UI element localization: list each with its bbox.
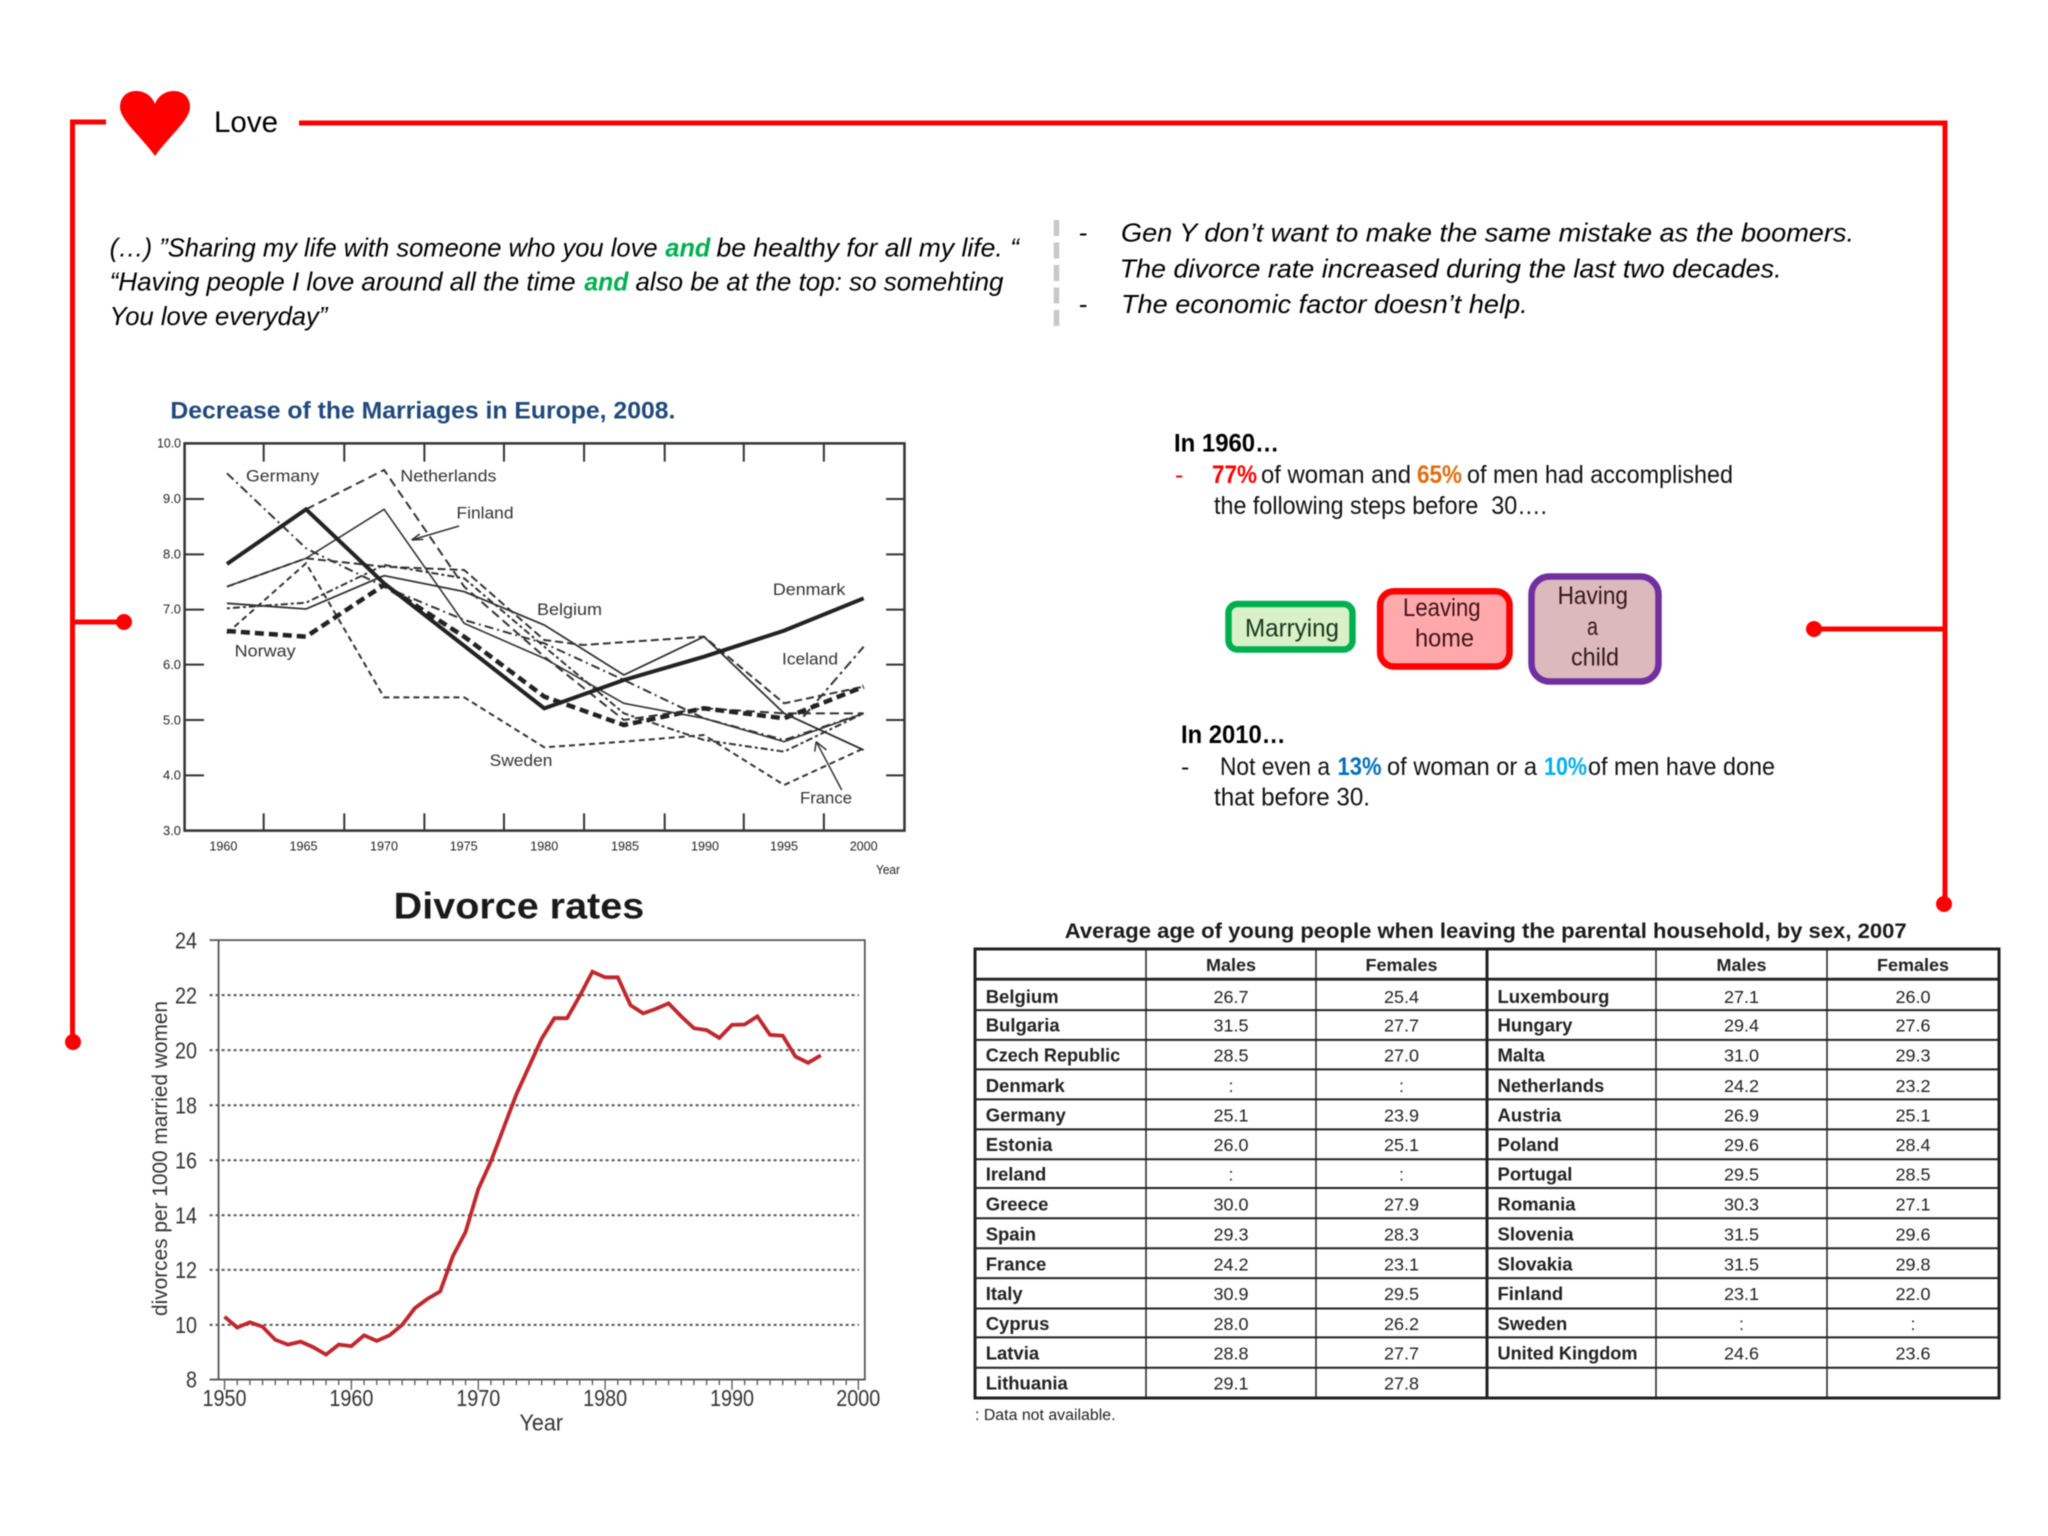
- table rows: left half: :: [1399, 1076, 1404, 1096]
- table rows: right half: Austria: [1498, 1105, 1562, 1126]
- heading: marriage chart title: Decrease of the Marriages in Europe, 2008.: [170, 397, 675, 424]
- table header: Males: [1716, 955, 1767, 975]
- text block: 1960 statistics: the following steps before 30….: [1214, 492, 1547, 520]
- text block: quotes: You love everyday”: [110, 301, 329, 331]
- x axis labels: 1995: [770, 839, 798, 854]
- box: Having a child: [1532, 576, 1658, 682]
- table rows: right half: 23.1: [1724, 1284, 1759, 1304]
- plot frame: [210, 940, 865, 1380]
- table rows: right half: Sweden: [1498, 1313, 1567, 1334]
- table rows: right half: Netherlands: [1498, 1075, 1604, 1096]
- table rows: left half: Germany: [986, 1105, 1067, 1126]
- series: Sweden: [227, 563, 864, 785]
- country labels: Denmark: [773, 580, 846, 599]
- y axis labels: [157, 436, 181, 838]
- table rows: right half: Luxembourg: [1498, 986, 1609, 1007]
- table rows: left half: Estonia: [986, 1134, 1053, 1155]
- table rows: left half: 30.9: [1213, 1284, 1249, 1304]
- table rows: right half: Hungary: [1498, 1014, 1573, 1035]
- table rows: right half: 26.9: [1724, 1106, 1759, 1126]
- table rows: right half: 27.1: [1724, 987, 1759, 1007]
- x axis labels: [202, 1385, 880, 1411]
- table rows: left half: 27.0: [1384, 1045, 1419, 1065]
- y axis labels: 10: [175, 1312, 197, 1338]
- box: Marrying: Marrying: [1245, 615, 1339, 643]
- table rows: left half: 29.5: [1384, 1284, 1419, 1304]
- table rows: right half: :: [1739, 1314, 1744, 1334]
- table rows: right half: 23.6: [1895, 1344, 1931, 1364]
- table header: Females: [1365, 955, 1438, 975]
- table rows: left half: 30.0: [1213, 1194, 1249, 1214]
- text block: quotes: “Having people I love around all the time: [110, 267, 576, 297]
- box: Having a child: child: [1571, 644, 1619, 672]
- y axis labels: 6.0: [163, 657, 181, 672]
- table rows: left half: 28.8: [1213, 1344, 1249, 1364]
- text block: 2010 statistics: Not even a: [1220, 753, 1330, 781]
- heading: 1960: In 1960…: [1174, 430, 1279, 458]
- divorce rate curve: [225, 972, 821, 1355]
- x axis labels: 1975: [450, 839, 478, 854]
- table rows: right half: [1498, 986, 1931, 1364]
- text block: Gen Y bullets: -: [1078, 218, 1088, 248]
- country labels: Finland: [456, 503, 514, 522]
- text block: Gen Y bullets: The economic factor doesn’t help.: [1121, 289, 1528, 319]
- table rows: left half: Latvia: [986, 1343, 1040, 1364]
- text block: quotes: and: [584, 267, 629, 297]
- arrows: Finland and France: [412, 526, 842, 790]
- table rows: right half: Finland: [1498, 1283, 1563, 1304]
- heading: Divorce rates: Divorce rates: [394, 886, 644, 926]
- y axis labels: 16: [175, 1147, 197, 1173]
- box: Marrying: [1228, 604, 1352, 650]
- y axis labels: 14: [175, 1202, 197, 1228]
- series: Finland: [227, 509, 864, 742]
- x axis labels: 2000: [850, 839, 878, 854]
- table rows: right half: 27.6: [1895, 1015, 1931, 1035]
- text block: quotes: be healthy for all my life. “: [716, 233, 1020, 263]
- table rows: left half: Denmark: [986, 1075, 1066, 1096]
- box: Having a child: a: [1587, 613, 1598, 641]
- text block: 2010 statistics: that before 30.: [1214, 784, 1370, 812]
- table grid: [975, 949, 1999, 1398]
- x axis title: Year: [520, 1410, 563, 1436]
- text block: 1960 statistics: of men had accomplished: [1467, 461, 1733, 489]
- table rows: left half: 27.7: [1384, 1015, 1419, 1035]
- table rows: right half: 27.1: [1895, 1194, 1931, 1214]
- y axis labels: 8: [186, 1367, 197, 1393]
- table rows: right half: :: [1910, 1314, 1916, 1334]
- series: Netherlands: [306, 470, 864, 720]
- heading: 2010: In 2010…: [1181, 721, 1286, 749]
- y axis labels: 7.0: [163, 602, 181, 617]
- table rows: right half: 30.3: [1724, 1194, 1759, 1214]
- y axis labels: 10.0: [157, 436, 181, 451]
- y axis labels: 5.0: [163, 712, 181, 727]
- line chart: marriages in Europe: [157, 436, 904, 877]
- x axis labels: 1980: [530, 839, 558, 854]
- text block: 1960 statistics: of woman and: [1261, 461, 1411, 489]
- text block: 2010 statistics: -: [1181, 753, 1189, 781]
- table rows: left half: 27.7: [1384, 1344, 1419, 1364]
- table rows: right half: 26.0: [1895, 987, 1931, 1007]
- chart frame and ticks: [185, 443, 904, 831]
- table rows: left half: 29.1: [1213, 1374, 1249, 1394]
- x axis labels: 1980: [583, 1385, 627, 1411]
- table rows: right half: 31.0: [1724, 1045, 1759, 1065]
- table rows: right half: 29.6: [1724, 1135, 1759, 1155]
- table rows: left half: 29.3: [1213, 1225, 1249, 1245]
- y axis labels: 8.0: [163, 546, 181, 561]
- table rows: right half: Portugal: [1498, 1163, 1572, 1184]
- table rows: left half: Cyprus: [986, 1313, 1049, 1334]
- table rows: right half: 28.4: [1895, 1135, 1931, 1155]
- text block: Gen Y bullets: The divorce rate increased during the last two decades.: [1120, 254, 1782, 284]
- text block: 2010 statistics: of woman or a: [1387, 753, 1537, 781]
- country labels: Sweden: [490, 751, 552, 770]
- text block: quotes: and: [665, 233, 711, 263]
- table rows: left half: 23.1: [1384, 1255, 1419, 1274]
- table rows: right half: 29.6: [1895, 1225, 1931, 1245]
- country labels: Iceland: [782, 649, 838, 668]
- heading: Love: Love: [214, 106, 278, 139]
- x axis labels: 1950: [202, 1385, 246, 1411]
- text block: Gen Y bullets: [1078, 218, 1854, 319]
- y axis labels: 22: [175, 982, 197, 1008]
- x axis labels: 1990: [710, 1385, 754, 1411]
- text block: 2010 statistics: 13%: [1338, 753, 1382, 781]
- y axis labels: [175, 927, 197, 1393]
- country labels: Germany: [246, 467, 320, 486]
- table rows: left half: 25.4: [1384, 987, 1419, 1007]
- table rows: left half: Spain: [986, 1224, 1036, 1245]
- text block: 2010 statistics: [1181, 753, 1775, 812]
- grid lines: [210, 995, 859, 1325]
- table rows: left half: 27.8: [1384, 1374, 1419, 1394]
- country labels: Norway: [235, 642, 296, 661]
- y axis labels: 20: [175, 1037, 197, 1063]
- text block: 2010 statistics: of men have done: [1588, 753, 1775, 781]
- table header: [1206, 955, 1949, 975]
- table rows: left half: [986, 986, 1419, 1394]
- text block: quotes: also be at the top: so somehting: [636, 267, 1004, 297]
- table header: Males: [1206, 955, 1256, 975]
- x axis labels: 2000: [836, 1385, 880, 1411]
- country labels: Netherlands: [400, 467, 496, 486]
- table rows: right half: 29.3: [1895, 1045, 1931, 1065]
- series: Denmark: [227, 509, 864, 708]
- country labels: France: [800, 788, 852, 807]
- text block: quotes: (…) ”Sharing my life with someone who you love: [110, 233, 658, 263]
- table header: Females: [1877, 955, 1949, 975]
- table rows: right half: 25.1: [1895, 1106, 1931, 1126]
- table rows: left half: Belgium: [986, 986, 1059, 1007]
- x axis labels: 1985: [611, 839, 639, 854]
- table rows: left half: 26.0: [1213, 1135, 1249, 1155]
- text block: 1960 statistics: -: [1175, 461, 1183, 489]
- text block: Gen Y bullets: Gen Y don’t want to make the same mistake as the boomers.: [1121, 218, 1854, 248]
- box: Leaving home: Leaving: [1403, 594, 1481, 622]
- series: Iceland: [227, 558, 864, 703]
- box: Leaving home: [1380, 591, 1510, 666]
- series: Germany: [227, 473, 864, 740]
- red frame connector: left: [65, 122, 132, 1050]
- table rows: right half: 24.2: [1724, 1076, 1759, 1096]
- text block: 1960 statistics: [1175, 461, 1733, 520]
- table rows: left half: 23.9: [1384, 1106, 1419, 1126]
- table rows: left half: :: [1228, 1164, 1234, 1184]
- y axis labels: 24: [175, 927, 197, 953]
- series: France: [227, 565, 864, 752]
- box: Having a child: Having: [1558, 582, 1628, 610]
- x axis labels: [209, 839, 901, 877]
- table rows: left half: 26.7: [1213, 987, 1249, 1007]
- series: Norway: [227, 585, 864, 725]
- table rows: left half: Italy: [986, 1283, 1023, 1304]
- box: Leaving home: home: [1415, 625, 1474, 653]
- text block: Gen Y bullets: -: [1078, 289, 1088, 319]
- table rows: left half: 25.1: [1384, 1135, 1419, 1155]
- table rows: right half: Slovenia: [1498, 1224, 1574, 1245]
- table rows: left half: 24.2: [1213, 1255, 1249, 1274]
- heading: table title: Average age of young people when leaving the parental household, by sex, 2007: [1065, 919, 1907, 943]
- table rows: left half: Czech Republic: [986, 1044, 1120, 1065]
- table rows: right half: 29.4: [1724, 1015, 1759, 1035]
- x axis labels: 1970: [456, 1385, 500, 1411]
- table rows: right half: Malta: [1498, 1044, 1545, 1065]
- y axis labels: 4.0: [163, 768, 181, 783]
- icon: heart: [120, 91, 190, 156]
- table rows: left half: :: [1228, 1076, 1234, 1096]
- table rows: left half: Ireland: [986, 1163, 1046, 1184]
- table rows: right half: 31.5: [1724, 1225, 1759, 1245]
- x axis labels: 1960: [329, 1385, 373, 1411]
- data table: [975, 949, 1999, 1398]
- table rows: left half: Greece: [986, 1193, 1048, 1214]
- table rows: left half: 25.1: [1213, 1106, 1249, 1126]
- table rows: right half: 29.5: [1724, 1164, 1759, 1184]
- line chart: divorce rates: [149, 927, 880, 1436]
- table rows: right half: 22.0: [1895, 1284, 1931, 1304]
- table rows: right half: 23.2: [1895, 1076, 1931, 1096]
- y axis title: divorces per 1000 married women: [149, 1001, 172, 1316]
- table rows: right half: Slovakia: [1498, 1254, 1573, 1274]
- x axis labels: 1960: [209, 839, 237, 854]
- table footnote: : Data not available.: [975, 1407, 1116, 1424]
- red frame connector: right: [299, 123, 1952, 912]
- table rows: right half: 29.8: [1895, 1255, 1931, 1274]
- text block: quotes: [110, 233, 1020, 331]
- x axis labels: 1970: [370, 839, 398, 854]
- table rows: left half: 28.5: [1213, 1045, 1249, 1065]
- country labels: Belgium: [537, 600, 602, 619]
- table rows: left half: France: [986, 1254, 1046, 1274]
- text block: 1960 statistics: 65%: [1417, 461, 1462, 489]
- table rows: left half: Lithuania: [986, 1373, 1069, 1394]
- text block: 1960 statistics: 77%: [1212, 461, 1257, 489]
- table rows: left half: 26.2: [1384, 1314, 1419, 1334]
- text block: 2010 statistics: 10%: [1544, 753, 1587, 781]
- y axis labels: 12: [175, 1257, 197, 1283]
- table rows: left half: 31.5: [1213, 1015, 1249, 1035]
- x axis labels: 1965: [290, 839, 318, 854]
- table rows: right half: 28.5: [1895, 1164, 1931, 1184]
- table rows: left half: Bulgaria: [986, 1014, 1060, 1035]
- table rows: left half: 28.0: [1213, 1314, 1249, 1334]
- y axis labels: 18: [175, 1092, 197, 1118]
- x axis labels: Year: [876, 862, 901, 877]
- table rows: left half: 27.9: [1384, 1194, 1419, 1214]
- table rows: right half: Romania: [1498, 1193, 1576, 1214]
- series: Belgium: [227, 576, 864, 750]
- x axis labels: 1990: [691, 839, 719, 854]
- year ticks: [225, 1380, 858, 1390]
- divider: gray dashed: [1054, 220, 1059, 328]
- y axis labels: 9.0: [163, 491, 181, 506]
- table rows: right half: Poland: [1498, 1134, 1559, 1155]
- country labels: [235, 467, 852, 807]
- table rows: right half: United Kingdom: [1498, 1343, 1638, 1364]
- y axis labels: 3.0: [163, 823, 181, 838]
- table rows: right half: 31.5: [1724, 1255, 1759, 1274]
- table rows: left half: :: [1399, 1164, 1404, 1184]
- table rows: right half: 24.6: [1724, 1344, 1759, 1364]
- table rows: left half: 28.3: [1384, 1225, 1419, 1245]
